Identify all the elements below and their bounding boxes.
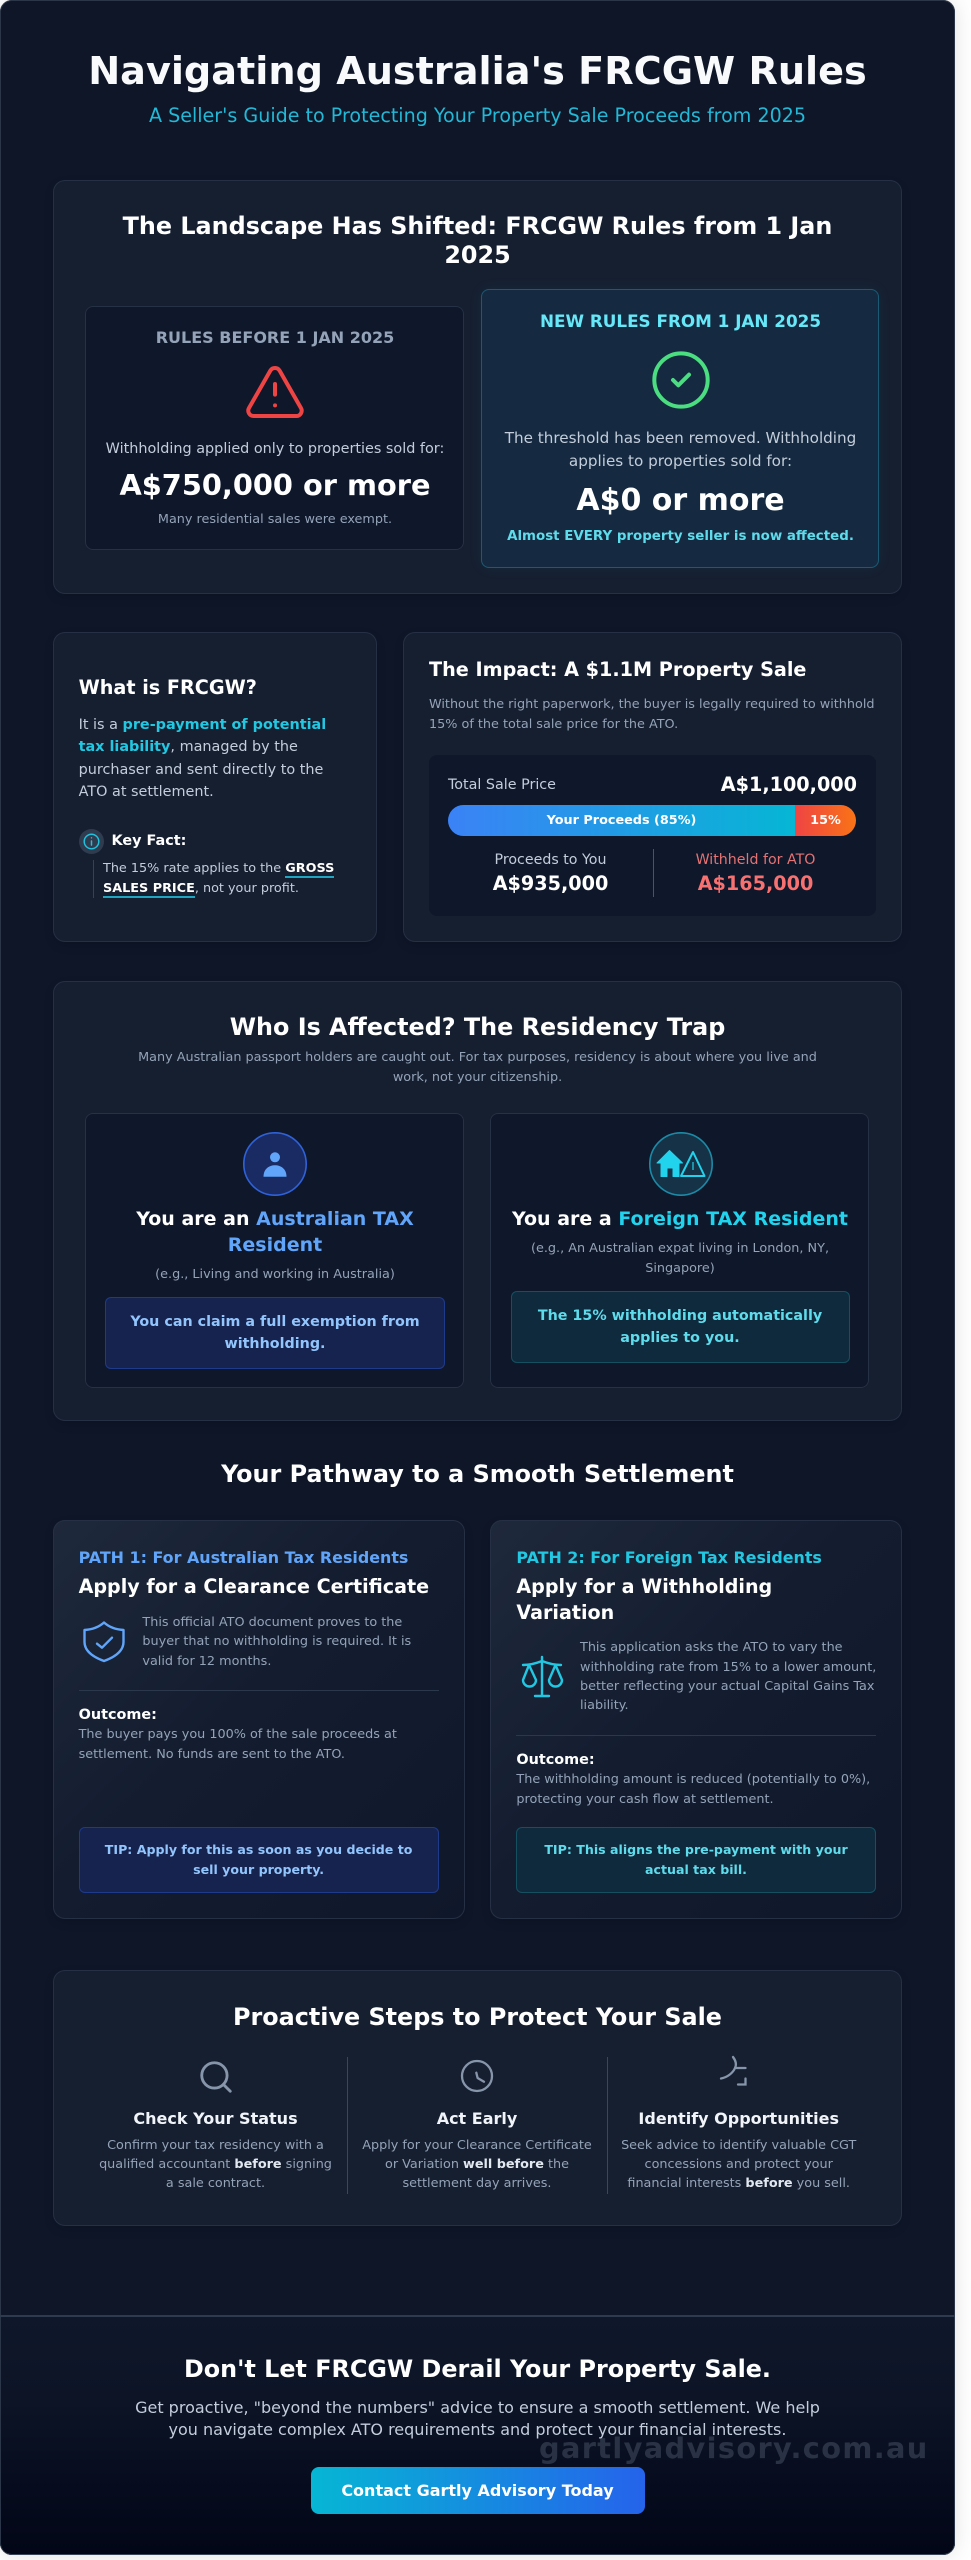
bar segment: withheld 15%: 15% — [810, 813, 841, 828]
text: variation description: withholding rate from 15% to a lower amount, — [580, 1660, 876, 1675]
step text: check status — [99, 2138, 332, 2191]
label: withheld: Withheld for ATO — [696, 852, 815, 868]
text: residency intro — [138, 1050, 817, 1085]
panel: rules landscape — [53, 180, 902, 594]
panel: who is affected — [53, 981, 902, 1421]
chart: sale breakdown — [429, 755, 876, 916]
heading: Australian resident: You are an Australian TAX — [136, 1208, 414, 1230]
icon: person — [243, 1132, 307, 1196]
bar segment: proceeds 85% — [448, 805, 795, 836]
heading: landscape — [122, 212, 832, 268]
note: exempt: Many residential sales were exempt. — [158, 512, 392, 527]
heading: pathway: Your Pathway to a Smooth Settlement — [221, 1460, 734, 1488]
text: example — [531, 1241, 829, 1276]
heading: withholding variation: Variation — [516, 1601, 614, 1624]
text: impact intro: Without the right paperwork, the buyer is legally required to withhold — [429, 697, 874, 712]
text: definition: It is a pre-payment of potential — [79, 717, 326, 733]
heading: clearance certificate: Apply for a Clearance Certificate — [79, 1575, 429, 1598]
heading: impact: The Impact: A $1.1M Property Sale — [429, 658, 806, 681]
text: clearance description: This official ATO document proves to the — [142, 1615, 402, 1630]
heading: Australian resident: Resident — [228, 1234, 322, 1256]
heading: footer: Don't Let FRCGW Derail Your Property Sale. — [184, 2355, 771, 2383]
divider — [516, 1735, 876, 1736]
footer call to action — [0, 2315, 955, 2555]
callout text: withholding. — [224, 1336, 325, 1352]
text: old threshold intro: Withholding applied only to properties sold for: — [106, 440, 444, 456]
tip text — [544, 1842, 848, 1877]
text: new threshold intro: applies to properties sold for: — [569, 452, 792, 470]
text: clearance description: valid for 12 months. — [142, 1654, 271, 1668]
label: outcome: Outcome: — [79, 1707, 157, 1723]
text: key fact: The 15% rate applies to the GROSS — [103, 861, 334, 876]
text: clearance description — [142, 1615, 411, 1668]
tip text: TIP: This aligns the pre-payment with your — [544, 1842, 848, 1857]
text: variation description — [580, 1640, 876, 1713]
heading: what is FRCGW: What is FRCGW? — [79, 676, 257, 699]
step title: act early: Act Early — [437, 2109, 517, 2128]
text: definition — [78, 717, 326, 800]
label: path 2: PATH 2: For Foreign Tax Residents — [516, 1548, 822, 1567]
icon: warning triangle — [246, 366, 304, 418]
callout: exemption — [105, 1297, 444, 1369]
text: example: (e.g., Living and working in Australia) — [155, 1267, 395, 1282]
text: impact intro — [429, 697, 874, 732]
text: new threshold intro — [504, 428, 856, 470]
text: residency intro: Many Australian passport holders are caught out. For tax purposes, residency is about where you live and — [138, 1050, 817, 1065]
subtitle: A Seller's Guide to Protecting Your Property Sale Proceeds from 2025 — [149, 104, 806, 127]
heading: Australian resident — [136, 1208, 414, 1256]
text: definition: tax liability, managed by the — [79, 739, 298, 755]
callout text: The 15% withholding automatically — [538, 1308, 822, 1324]
text: footer: Get proactive, "beyond the numbers" advice to ensure a smooth settlement. We help — [135, 2398, 820, 2417]
step text: check status: Confirm your tax residency with a — [107, 2138, 324, 2153]
heading: withholding variation: Apply for a Withholding — [516, 1575, 772, 1598]
heading: withholding variation — [516, 1575, 772, 1624]
label: rules before: RULES BEFORE 1 JAN 2025 — [156, 328, 394, 346]
tip text — [104, 1842, 412, 1877]
column divider — [347, 2057, 348, 2194]
panel: proactive steps — [53, 1970, 902, 2226]
bar segment: withheld 15% — [795, 805, 856, 836]
step title: identify opportunities: Identify Opportunities — [638, 2109, 839, 2128]
divider — [79, 1690, 439, 1691]
icon: house and warning — [649, 1132, 713, 1196]
text: outcome — [78, 1727, 397, 1762]
card: Australian tax resident — [85, 1113, 464, 1388]
step title: check status: Check Your Status — [133, 2109, 298, 2128]
tip text: actual tax bill. — [645, 1862, 747, 1877]
icon: info — [79, 829, 104, 854]
icon: clock — [460, 2060, 494, 2092]
text: outcome: settlement. No funds are sent to the ATO. — [79, 1747, 345, 1762]
tip text: sell your property. — [193, 1862, 324, 1877]
card: foreign tax resident — [490, 1113, 869, 1388]
heading: who is affected: Who Is Affected? The Residency Trap — [230, 1013, 725, 1041]
key fact rule — [92, 860, 94, 898]
heading: landscape: The Landscape Has Shifted: FRCGW Rules from 1 Jan — [123, 212, 832, 240]
label: key fact: Key Fact: — [112, 833, 186, 849]
text: clearance description: buyer that no withholding is required. It is — [142, 1634, 411, 1649]
text: definition: purchaser and sent directly to the — [79, 762, 323, 778]
icon: opportunities — [720, 2056, 747, 2086]
text: residency intro: work, not your citizenship. — [393, 1070, 562, 1085]
text: definition: ATO at settlement. — [79, 784, 214, 800]
callout: automatic withholding — [511, 1291, 850, 1363]
text: impact intro: 15% of the total sale price for the ATO. — [429, 717, 678, 732]
heading: proactive steps: Proactive Steps to Protect Your Sale — [233, 2003, 722, 2031]
step text: act early — [362, 2138, 592, 2191]
text: variation description: liability. — [580, 1698, 629, 1713]
label: proceeds: Proceeds to You — [495, 852, 606, 868]
callout: tip 1 — [79, 1827, 439, 1893]
text: example: Singapore) — [645, 1261, 715, 1276]
text: outcome — [516, 1772, 870, 1807]
panel: the impact — [403, 632, 902, 942]
heading: landscape: 2025 — [444, 240, 511, 268]
icon: scales — [522, 1656, 564, 1698]
card: new rules — [480, 289, 879, 568]
watermark: gartlyadvisory.com.au — [539, 2430, 929, 2464]
column divider — [607, 2057, 608, 2194]
text: outcome: The withholding amount is reduced (potentially to 0%), — [516, 1772, 870, 1787]
note: everyone affected: Almost EVERY property seller is now affected. — [507, 528, 854, 544]
icon: check circle — [652, 351, 710, 409]
text: outcome: The buyer pays you 100% of the sale proceeds at — [79, 1727, 397, 1742]
bar segment: proceeds 85%: Your Proceeds (85%) — [547, 813, 696, 828]
step text: check status: qualified accountant before signing — [99, 2157, 332, 2172]
label: new rules: NEW RULES FROM 1 JAN 2025 — [540, 311, 821, 331]
tip text: TIP: Apply for this as soon as you decide to — [105, 1842, 412, 1857]
panel: path 2 — [490, 1520, 902, 1919]
callout text — [130, 1314, 420, 1352]
callout text: applies to you. — [620, 1330, 740, 1346]
label: path 1: PATH 1: For Australian Tax Residents — [79, 1548, 408, 1567]
value: withheld: A$165,000 — [698, 872, 813, 895]
figure: old threshold: A$750,000 or more — [119, 468, 431, 502]
step text: identify opportunities: concessions and protect your — [645, 2157, 833, 2172]
icon: shield check — [83, 1621, 125, 1662]
card: rules before — [85, 306, 464, 550]
text: example: (e.g., An Australian expat living in London, NY, — [531, 1241, 829, 1256]
text: outcome: protecting your cash flow at settlement. — [516, 1792, 774, 1807]
text: variation description: This application asks the ATO to vary the — [580, 1640, 843, 1655]
text: key fact — [102, 861, 334, 898]
value: total sale price: A$1,100,000 — [721, 773, 857, 796]
heading: foreign resident: You are a Foreign TAX Resident — [512, 1208, 848, 1230]
callout text — [538, 1308, 822, 1346]
figure: new threshold: A$0 or more — [576, 483, 785, 518]
text: footer: you navigate complex ATO requirements and protect your financial interests. — [169, 2420, 786, 2439]
step text: identify opportunities: Seek advice to identify valuable CGT — [621, 2138, 856, 2153]
text: variation description: better reflecting your actual Capital Gains Tax — [580, 1679, 874, 1694]
text: new threshold intro: The threshold has been removed. Withholding — [505, 428, 856, 446]
panel: path 1 — [53, 1520, 464, 1919]
value: proceeds: A$935,000 — [493, 872, 608, 895]
split divider — [653, 849, 654, 897]
step text: identify opportunities — [621, 2138, 856, 2191]
label: outcome: Outcome: — [516, 1752, 595, 1768]
step text: check status: a sale contract. — [166, 2176, 265, 2191]
step text: act early: Apply for your Clearance Certificate — [362, 2138, 592, 2153]
text: footer — [135, 2398, 820, 2439]
button: contact: Contact Gartly Advisory Today — [341, 2481, 614, 2500]
step text: act early: or Variation well before the — [385, 2157, 569, 2172]
stacked bar — [448, 805, 856, 836]
text: key fact: SALES PRICE, not your profit. — [103, 881, 299, 896]
step text: act early: settlement day arrives. — [402, 2176, 552, 2191]
step text: identify opportunities: financial interests before you sell. — [627, 2176, 850, 2191]
panel: what is FRCGW — [53, 632, 376, 942]
callout: tip 2 — [516, 1827, 876, 1893]
icon: magnifier — [200, 2061, 232, 2093]
title: Navigating Australia's FRCGW Rules — [88, 50, 867, 94]
callout text: You can claim a full exemption from — [130, 1314, 420, 1330]
label: total sale price: Total Sale Price — [448, 777, 556, 793]
button: contact — [310, 2467, 644, 2514]
